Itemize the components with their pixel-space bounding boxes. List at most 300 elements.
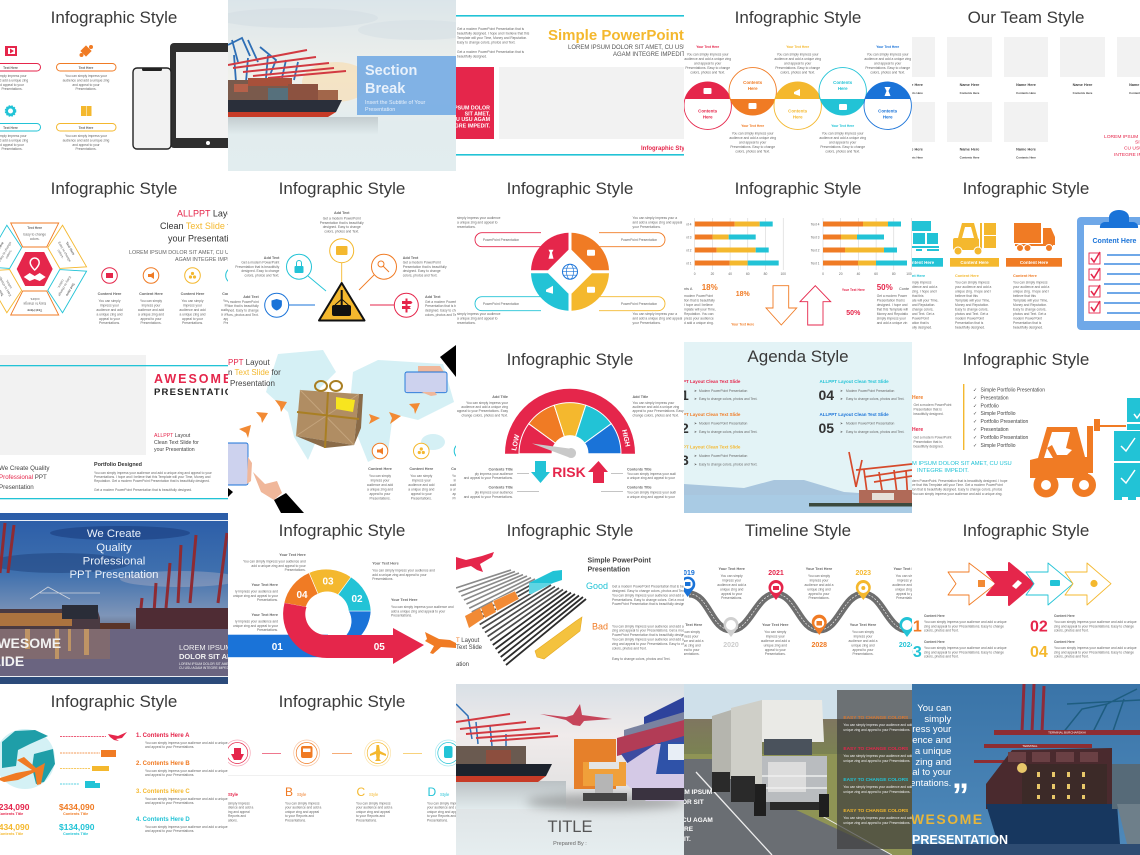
team names: Name Here (960, 148, 979, 152)
content columns: impress your (225, 304, 244, 308)
red arrow (283, 603, 424, 664)
donut captions: Presentations. (372, 577, 393, 581)
bar chart right: 60 (874, 272, 878, 276)
columns of text: Content Here (1013, 274, 1037, 278)
intro text: Get a modern PowerPoint Presentation that is (457, 50, 524, 54)
add text captions: Get a modern PowerPoint (221, 300, 259, 304)
columns of text: PowerPoint (912, 316, 929, 320)
bar chart left: 80 (764, 272, 767, 276)
slide: infographic with tablet and phone (0, 8, 228, 151)
slide: logistics icons and checklist (906, 179, 1140, 330)
pill labels and paragraphs: Text Here (3, 126, 18, 130)
donut captions: ly impress your audience and (235, 620, 278, 624)
pill labels and paragraphs: audience and add a unique zing (63, 78, 110, 82)
left captions: Get a modern PowerPoint (914, 403, 952, 407)
timeline captions: Your Text Here (806, 567, 832, 571)
percentage callouts: Money and Reputatio (877, 312, 908, 316)
grey overlay panel: unique zing and appeal to your Presentations. (843, 790, 911, 794)
heading: Clean Text Slide for (154, 440, 199, 446)
letter paragraphs: Reports and (228, 814, 246, 818)
step numbers: 01 (904, 618, 922, 636)
checklist: Presentation (980, 427, 1009, 433)
segment numbers: 03 (322, 576, 334, 588)
team photo placeholders (891, 37, 1140, 142)
add text captions: designed. Easy to change (425, 308, 463, 312)
hexagon diagram: Easy to change (23, 232, 46, 236)
centered slogan: Professional (83, 556, 145, 568)
grey overlay panel: You can simply impress your audience and add a (843, 754, 915, 758)
arrow down (766, 286, 797, 325)
awesome presentation heading: PRESENTATION (912, 833, 1008, 847)
percentage callouts: modern PowerPoint (684, 294, 713, 298)
columns of text: unique zing. I hope and I (1013, 290, 1049, 294)
captions: audience and add a unique zing (774, 57, 821, 61)
captions: Your Text Here (786, 45, 809, 49)
checklist: ✓ (973, 443, 977, 449)
portfolio text: You can simply impress your audience and add a unique zing and appeal to your (94, 471, 213, 475)
content columns: impress your (183, 304, 203, 308)
percentage callouts: d add a unique zing. (684, 321, 714, 325)
letter paragraphs: Presentations. (285, 818, 306, 822)
circle labels: Here (838, 86, 848, 91)
content columns: You can simply (98, 299, 121, 303)
content columns: Content Here (139, 292, 163, 296)
lorem overlay text: DOLOR SIT AMET, (179, 652, 244, 661)
agenda items right: ALLPPT Layout Clean Text Slide (820, 379, 889, 384)
risk captions: change colors, photos and Text. (632, 414, 679, 418)
quote text: impress your (897, 724, 951, 735)
checklist (973, 388, 1045, 449)
donut captions: Your Text Here (279, 553, 306, 557)
lorem text: M IPSUM DOLOR SIT AMET, CU USU (912, 461, 1012, 467)
columns of text: believe that this (1013, 294, 1036, 298)
content columns: audience and add (408, 483, 435, 487)
money figures: $434,090 (59, 802, 95, 812)
content header bars (906, 258, 1062, 267)
percentage callouts: Your Text Here (731, 322, 754, 326)
icon: gear (5, 106, 16, 116)
step text: zing and appeal to your Presentations. Easy to change (1054, 650, 1134, 654)
paragraphs: simply impress your audience (457, 216, 501, 220)
add text captions: colors, photos and Text. (403, 274, 438, 278)
content columns: appeal to your (141, 317, 162, 321)
content columns: Content Here (98, 292, 121, 296)
content columns: audience and add (221, 308, 247, 312)
quote mark: ” (952, 777, 969, 815)
content columns: appeal to your (182, 317, 204, 321)
team names: Contents Here (903, 91, 923, 95)
add text captions: Get a modern PowerPoint (323, 216, 361, 220)
risk captions: You can simply impress your audi (627, 472, 676, 476)
slide: simple powerpoint: Infographic Style (641, 146, 690, 152)
bar chart left: 0 (694, 272, 696, 276)
timeline captions: You can simply (896, 574, 918, 578)
timeline captions: impress your (680, 634, 699, 638)
letter headings (228, 785, 450, 799)
lorem overlay text: CU USU AGAM INTEGRE IMPEDIT. (179, 666, 233, 670)
add text captions (215, 211, 469, 317)
icon: teal truck (529, 570, 562, 594)
columns of text: Easy to change colors, (955, 308, 988, 312)
team names: Contents Here (1016, 91, 1036, 95)
slide: our team: Our Team Style (968, 8, 1084, 27)
columns of text: your audience and add a (1013, 285, 1049, 289)
percentage callouts: 18% (736, 291, 750, 298)
columns of text: ation that is (912, 321, 929, 325)
content columns: You can simply (140, 299, 162, 303)
slide: quote with container ship (891, 684, 1140, 855)
heading: AGAM INTEGRE IMPEDIT. (175, 257, 241, 263)
slide: circle chain infographic (684, 8, 912, 154)
bar chart left (686, 218, 786, 276)
segment numbers: 05 (374, 642, 385, 653)
content columns: Presentations. (452, 496, 474, 500)
lorem text: You can simply impress your audience and add a unique zing. (912, 492, 1003, 496)
risk captions: Contents Title (488, 486, 513, 490)
quote text (891, 703, 952, 789)
heading (548, 27, 688, 58)
percentage callouts: that this Template will (877, 308, 908, 312)
bar chart left: xt 3 (686, 236, 692, 240)
agenda items right: 05 (818, 420, 834, 436)
left captions: Here (912, 395, 923, 401)
segment numbers: 02 (351, 594, 363, 605)
money figures: Contents Title (63, 832, 88, 836)
risk captions: appeal to your Presentations. Easy (632, 409, 684, 413)
timeline captions: appeal to your (809, 592, 830, 596)
step text: Content Here (924, 640, 945, 644)
globe with plane (0, 729, 55, 789)
good and bad captions: Good (586, 581, 608, 591)
content header bars: Content Here (1020, 260, 1049, 265)
team names: Name Here (960, 83, 979, 87)
contents list: You can simply impress your audience and add a unique (145, 797, 228, 801)
letter headings: Style (369, 792, 379, 797)
timeline captions: audience and add a (849, 639, 878, 643)
add text captions: Presentation that is beautifully (235, 265, 280, 269)
timeline captions: You can simply (808, 574, 830, 578)
captions: Presentations. Easy to change (775, 66, 820, 70)
captions: You can simply impress your (732, 132, 775, 136)
donut captions: add a unique zing and appeal to your (372, 573, 427, 577)
pill labels and paragraphs: and appeal to your (72, 83, 101, 87)
timeline captions: audience and add a (675, 639, 704, 643)
timeline captions: unique zing and (764, 644, 787, 648)
years: 2024 (899, 642, 915, 649)
circle labels: Contents (698, 108, 718, 114)
bar chart right: 80 (892, 272, 896, 276)
risk label and arrows (531, 461, 608, 483)
slide: barcode transport: Infographic Style (507, 521, 633, 540)
timeline captions: impress your (766, 634, 786, 638)
process arrows (948, 563, 1111, 605)
good and bad captions: You can simply impress your audience and add a (612, 594, 684, 598)
letter paragraphs: your audience and add a (285, 806, 321, 810)
centered slogan: We Create (87, 528, 141, 540)
slide: forklift checklist (912, 350, 1140, 500)
captions: colors, photos and Text. (870, 70, 905, 74)
add text captions: Presentation that is beautifully (425, 304, 469, 308)
checklist: Simple Portfolio Presentation (980, 388, 1045, 394)
timeline captions: unique zing and (677, 644, 701, 648)
timeline captions: unique zing and (851, 644, 875, 648)
add text captions: colors, photos and Text. (245, 274, 279, 278)
content columns: Presentations. (182, 321, 203, 325)
heading: Presentation (230, 379, 275, 388)
checklist: Portfolio Presentation (980, 435, 1029, 441)
lorem text (912, 461, 1012, 496)
step text: You can simply impress your audience and add a unique (1054, 646, 1137, 650)
add text captions: Presentation that is beautifully (403, 265, 447, 269)
circle labels: Contents (743, 80, 763, 85)
hexagon diagram: Easy to change (57, 275, 72, 297)
container ship at terminal: TERMINAL (1022, 744, 1038, 748)
phone in left hand and pointing hand (222, 443, 304, 513)
agenda items left: ➤ (694, 430, 697, 434)
slide: stacked bar charts and arrows (684, 179, 912, 326)
agenda items left: Easy to change colors, photos and Text. (699, 397, 757, 401)
paragraphs: your Presentations. (632, 225, 661, 229)
contents list: 1. Contents Here A (136, 733, 190, 739)
donut captions: Presentations. (257, 598, 278, 602)
map pins (680, 577, 914, 637)
step text: Content Here (1054, 640, 1075, 644)
add text captions: colors, photos and Text. (324, 230, 359, 234)
team names: Contents Here (960, 156, 980, 160)
team names: Contents Here (1016, 156, 1036, 160)
timeline captions: audience and add a (892, 583, 921, 587)
icon: yellow ship (535, 617, 582, 659)
percentage callouts: nts A (684, 287, 693, 291)
donut captions: add a unique zing and appeal to your (251, 564, 307, 568)
columns of text: unique zing. I hope and I (955, 290, 991, 294)
slide: harbour at dusk photo (0, 513, 244, 684)
red box (443, 67, 494, 139)
slide: donut arrow infographic (228, 521, 456, 664)
awesome slide text (0, 635, 61, 669)
add text captions: Presentation that is beautifully (215, 304, 259, 308)
pill labels and paragraphs: d appeal to your (0, 143, 25, 147)
captions: Presentations. Easy to change (865, 66, 910, 70)
circle chain (684, 68, 911, 129)
icon: boxes on pallet (910, 221, 939, 251)
red box: INTEGRE IMPEDIT. (443, 124, 491, 130)
slide: logistics icons and checklist: Infographic Style (963, 179, 1089, 198)
contents list: and appeal to your Presentations. (145, 745, 194, 749)
quote text: add a unique (896, 746, 951, 757)
risk captions: Contents Title (627, 486, 652, 490)
content icons (102, 268, 241, 283)
slide: transport icons ABCD: Infographic Style (279, 692, 405, 711)
intro text: beautifully designed. I hope and I believe that this (457, 32, 530, 36)
team names: Name Here (1073, 83, 1092, 87)
agenda items left: 3 (681, 452, 689, 468)
letter paragraphs: Presentations. (427, 818, 448, 822)
quote text: Presentations. (891, 778, 951, 789)
team names: Name Here (1016, 148, 1036, 152)
content columns: a unique zing and (221, 312, 247, 316)
checklist: ✓ (973, 396, 977, 402)
heading: Clean Text Slide for (160, 221, 238, 231)
step text: colors, photos and Text. (1054, 628, 1089, 632)
vehicle icons (85, 732, 127, 788)
agenda items left: Modern PowerPoint Presentation (699, 422, 748, 426)
slide: risk gauge (457, 350, 684, 499)
risk label and arrows: RISK (552, 464, 586, 480)
add text captions: Add Text (264, 256, 280, 260)
content columns: audience and add (138, 308, 164, 312)
risk captions: a unique zing and appeal to your (627, 476, 676, 480)
container ship at terminal: TERMINAL BURCHARDKAI (1048, 730, 1086, 734)
slide: globe and contents: Infographic Style (51, 692, 177, 711)
bar chart right: 100 (906, 272, 912, 276)
pill labels and paragraphs: and appeal to your (72, 143, 101, 147)
add text captions: designed. Easy to change (241, 269, 279, 273)
captions: Your Text Here (696, 45, 719, 49)
paragraphs: You can simply impress your a (632, 312, 677, 316)
orange truck (574, 739, 627, 801)
step numbers: 03 (904, 644, 922, 661)
phone in right hand (405, 345, 456, 396)
heading: PRESENTATION (154, 387, 241, 398)
agenda items right: ➤ (840, 397, 843, 401)
donut captions: You can simply impress your audience and (372, 568, 435, 572)
timeline captions: Your Text Here (850, 623, 876, 627)
team names: Name Here (903, 148, 923, 152)
slide: hazard triangle infographic: Infographic Style (279, 179, 405, 198)
donut captions: ly impress your audience and (235, 590, 278, 594)
risk captions: and appeal to your Presentations. (464, 476, 513, 480)
columns of text: believe that this (955, 294, 978, 298)
good and bad captions: You can simply impress your audience and add a unique (612, 638, 695, 642)
good and bad captions: You can simply impress your audience and add a unique (612, 624, 695, 628)
paragraphs: You can simply impress your a (632, 216, 677, 220)
columns of text: that this (912, 294, 924, 298)
content columns: You can simply (223, 299, 245, 303)
captions: audience and add a unique zing (684, 57, 731, 61)
step text: colors, photos and Text. (924, 628, 959, 632)
contents list: You can simply impress your audience and add a unique (145, 741, 228, 745)
letter headings: D (428, 785, 436, 799)
letter paragraphs (228, 802, 463, 822)
container ship (228, 38, 346, 117)
pill labels and paragraphs: Text Here (79, 66, 94, 70)
content columns: a unique zing and (179, 312, 206, 316)
pill labels and paragraphs: Presentations. (1, 87, 23, 91)
slide: title with ship plane truck and train (456, 684, 684, 855)
columns of text: change colors, (912, 308, 934, 312)
text pills (0, 64, 116, 131)
timeline captions: unique zing and (895, 588, 919, 592)
step text: You can simply impress your audience and add a unique (924, 646, 1007, 650)
team names (903, 83, 1140, 160)
section break box: Presentation (365, 107, 395, 113)
agenda items right: ➤ (840, 430, 843, 434)
bar chart left: xt 1 (686, 262, 692, 266)
add text captions: Get a modern PowerPoint (403, 260, 441, 264)
grey overlay panel (837, 690, 915, 849)
left white text: EM IPSUM (680, 789, 712, 796)
content columns: You can simply (181, 299, 204, 303)
percentage callouts (684, 283, 909, 326)
circle labels: Here (883, 114, 893, 120)
pill labels and paragraphs: You can simply impress your (65, 134, 108, 138)
bar chart right: 40 (857, 272, 860, 276)
grey overlay panel: EASY TO CHANGE COLORS (843, 746, 909, 752)
gauge: HIGH (620, 429, 631, 448)
columns of text: beautifully designed. (1013, 326, 1043, 330)
content columns: Content Here (451, 467, 475, 471)
left captions: beautifully designed. (914, 412, 944, 416)
agenda items left (681, 379, 757, 468)
timeline captions: Presentations. (808, 596, 830, 600)
hexagon diagram: Text Here (27, 226, 42, 230)
donut captions: Your Text Here (252, 613, 278, 617)
icon: forklift (953, 223, 996, 255)
quote text: audience and (894, 735, 951, 746)
timeline captions: Presentations. (721, 596, 742, 600)
letter headings: C (356, 785, 366, 799)
hexagon diagram: colors. (56, 279, 65, 289)
letter paragraphs: unique zing and appeal (356, 810, 390, 814)
container ship at terminal (912, 684, 1140, 855)
segment numbers: 01 (272, 642, 283, 653)
pill labels: PowerPoint Presentation (621, 302, 657, 306)
bar chart right: Text 4 (811, 222, 820, 226)
slide: globe and contents (0, 692, 228, 836)
agenda items left: PT Layout Clean Text Slide (683, 379, 741, 384)
lorem text: dern PowerPoint. Presentation that is beautifully designed. I hope (912, 479, 1008, 483)
captions: and appeal to your (784, 62, 812, 66)
outlined pills (475, 233, 665, 311)
content columns: You can simply (410, 474, 433, 478)
good and bad captions (586, 581, 695, 661)
percentage callouts: Conte (899, 287, 909, 291)
heading: Simple PowerPoint (588, 558, 652, 565)
circle labels: Here (703, 114, 713, 120)
team names: Name Here (903, 83, 923, 87)
columns of text: nt Here (912, 274, 925, 278)
circle labels: Contents (878, 108, 898, 114)
timeline captions: appeal to your (896, 592, 918, 596)
left captions: Get a modern PowerPoint (914, 436, 952, 440)
columns of text: dience and add a (912, 285, 937, 289)
columns of text: zing. I hope and I (912, 290, 937, 294)
agenda items right: ALLPPT Layout Clean Text Slide (820, 412, 889, 417)
agenda items right (818, 379, 904, 436)
lorem text: ion that is beautifully designed. Easy to change colors, photos (912, 488, 1003, 492)
heading: Presentation (588, 566, 630, 574)
content columns: appeal to your (411, 492, 433, 496)
road (684, 759, 893, 855)
checklist: Simple Portfolio (980, 411, 1016, 417)
centered slogan (69, 528, 159, 581)
add text captions: Get a modern PowerPoint (425, 300, 463, 304)
slide: hexagon infographic (0, 179, 247, 325)
timeline captions: impress your (722, 578, 742, 582)
agenda items left: ➤ (694, 422, 697, 426)
years: 2019 (679, 570, 695, 577)
agenda items left: ➤ (694, 462, 697, 466)
percentage callouts: Your Text Here (842, 288, 865, 292)
letter paragraphs: dience and add a (228, 806, 253, 810)
heading: your Presentation (168, 234, 239, 244)
timeline captions: Presentations. (678, 652, 700, 656)
circle labels (698, 80, 898, 120)
content header bars: Content Here (906, 260, 935, 265)
left captions (912, 395, 952, 448)
content columns: appeal to your (453, 492, 474, 496)
